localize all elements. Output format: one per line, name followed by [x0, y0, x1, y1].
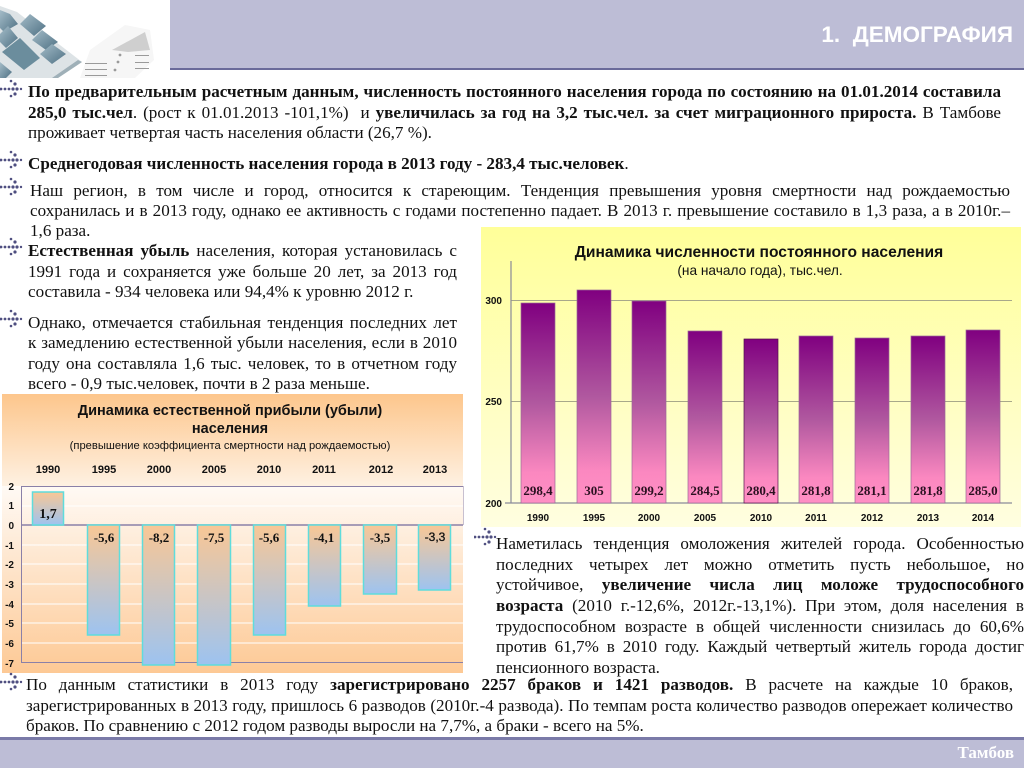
text block: slowing decrease: к замедлению естественной убыли населения, если в 2010 — [28, 333, 457, 352]
year labels: 2011 — [805, 513, 827, 524]
y axis labels: -5 — [5, 619, 14, 630]
y axis labels: 300 — [485, 296, 502, 307]
y axis labels: -3 — [5, 580, 14, 591]
header bar — [170, 0, 1024, 70]
y axis labels: -2 — [5, 560, 14, 571]
footer bar — [0, 737, 1024, 768]
bullet icon 1 — [0, 80, 22, 98]
text block: marriages and divorces — [26, 675, 1013, 735]
text block: aging region — [30, 181, 1010, 240]
text block: rejuvenation trend: последних четырех лет можно отметить пусть небольшое, но — [496, 555, 1024, 574]
bar values: 299,2 — [634, 483, 664, 498]
chart title: Динамика численности постоянного населения — [575, 244, 943, 261]
year labels: 2014 — [972, 513, 995, 524]
title: 1. ДЕМОГРАФИЯ — [821, 22, 1013, 47]
y axis labels: 200 — [485, 499, 502, 510]
text block: population intro — [28, 82, 1001, 142]
y axis labels: -6 — [5, 639, 14, 650]
bar values: 285,0 — [968, 483, 998, 498]
year labels: 1995 — [92, 464, 116, 476]
text block: natural decrease — [28, 241, 457, 301]
y axis labels: 1 — [8, 501, 14, 512]
text block: rejuvenation trend: устойчивое, увеличение числа лиц моложе трудоспособного — [496, 575, 1024, 594]
bar values: 281,8 — [913, 483, 943, 498]
bar values: 305 — [584, 483, 604, 498]
bar value: 2013: -3,3 — [425, 530, 446, 544]
chart title — [70, 403, 391, 452]
bullet icon 6 — [474, 528, 496, 546]
year labels: 2012 — [369, 464, 393, 476]
bar values: -7,5 — [204, 530, 225, 545]
text block: average population: Среднегодовая численность населения города в 2013 году - 283,4 тыс.человек. — [28, 154, 629, 173]
text block: rejuvenation trend: Наметилась тенденция омоложения жителей города. Особенностью — [496, 534, 1024, 553]
gridlines — [21, 506, 463, 643]
bar values: -5,6 — [94, 530, 115, 545]
text block: aging region: сохранилась и в 2013 году, однако ее активность с годами постепенно падает. В 2013 г. превышение составило в 1,3 раза, а в 2010г.– — [30, 201, 1010, 220]
text block: rejuvenation trend: пенсионного возраста. — [496, 658, 660, 677]
text block: marriages and divorces: зарегистрированных в 2013 году, пришлось 6 разводов (2010г.-4 развода). По темпам роста количество разводов опережает количество — [26, 696, 1013, 715]
year labels: 2010 — [257, 464, 281, 476]
y axis labels: -1 — [5, 541, 14, 552]
bar values: 281,1 — [857, 483, 887, 498]
axes — [21, 486, 464, 663]
year labels: 2010 — [750, 513, 773, 524]
year labels: 1995 — [583, 513, 606, 524]
bars — [32, 492, 450, 665]
chart title — [575, 244, 943, 278]
year labels: 2013 — [917, 513, 940, 524]
chart panel: permanent population dynamics — [481, 227, 1021, 527]
y axis labels: 0 — [8, 521, 14, 532]
chart background — [2, 394, 463, 673]
text block: slowing decrease: Однако, отмечается стабильная тенденция последних лет — [28, 313, 457, 332]
bullet icon 3 — [0, 178, 22, 196]
year labels — [36, 464, 447, 476]
footer label: Тамбов — [957, 743, 1014, 762]
axes — [505, 261, 1012, 503]
year labels: 1990 — [36, 464, 60, 476]
chart title: населения — [192, 421, 268, 437]
text block: slowing decrease — [28, 313, 457, 393]
year labels — [527, 513, 995, 524]
y axis labels — [5, 482, 14, 670]
chart background — [481, 227, 1021, 527]
year labels: 2012 — [861, 513, 884, 524]
text block: rejuvenation trend: трудоспособном возрасте в общей численности снизилась до 60,6% — [496, 617, 1024, 636]
bullet icon 7 — [0, 672, 22, 690]
y axis labels: -7 — [5, 659, 14, 670]
y axis labels: -4 — [5, 600, 14, 611]
year labels: 2000 — [638, 513, 661, 524]
chart panel: natural increase dynamics — [2, 394, 464, 673]
bar values: -5,6 — [259, 530, 280, 545]
text block: population intro: По предварительным расчетным данным, численность постоянного населения города по состоянию на 01.01.2014 составила — [28, 82, 1001, 101]
text block: population intro: 285,0 тыс.чел. (рост к 01.01.2013 -101,1%) и увеличилась за год на 3,2 тыс.чел. за счет миграционного прироста. В Тамбове — [28, 103, 1001, 122]
text block: slowing decrease: году она составляла 1,6 тыс. человек, то в отчетном году — [28, 354, 457, 373]
bar values: 280,4 — [746, 483, 776, 498]
bar values: 1,7 — [39, 507, 57, 522]
text block: population intro: проживает четвертая часть населения области (26,7 %). — [28, 123, 432, 142]
text block: slowing decrease: всего - 0,9 тыс.человек, почти в 2 раза меньше. — [28, 374, 370, 393]
y axis labels: 250 — [485, 397, 502, 408]
text block: marriages and divorces: браков. По сравнению с 2012 годом разводы выросли на 7,7%, а браки - всего на 5%. — [26, 716, 644, 735]
bar values: 281,8 — [801, 483, 831, 498]
year labels: 2005 — [202, 464, 226, 476]
bar values: 284,5 — [690, 483, 720, 498]
year labels: 2011 — [312, 464, 336, 476]
text block: rejuvenation trend — [496, 534, 1024, 677]
text block: natural decrease: составила - 934 человека или 94,4% к уровню 2012 г. — [28, 282, 413, 301]
bar values: 298,4 — [523, 483, 553, 498]
chart title: (превышение коэффициента смертности над рождаемостью) — [70, 440, 391, 452]
y axis labels: 2 — [8, 482, 14, 493]
text block: rejuvenation trend: возраста (2010 г.-12,6%, 2012г.-13,1%). При этом, доля населения в — [496, 596, 1024, 615]
text block: natural decrease: Естественная убыль населения, которая установилась с — [28, 241, 457, 260]
year labels: 2000 — [147, 464, 171, 476]
year labels: 2005 — [694, 513, 717, 524]
bar values: -3,5 — [370, 530, 391, 545]
bars — [521, 290, 1000, 503]
bar values — [523, 483, 998, 498]
year labels: 1990 — [527, 513, 550, 524]
bar values: -8,2 — [149, 530, 169, 545]
bullet icon 4 — [0, 238, 22, 256]
chart title: (на начало года), тыс.чел. — [677, 263, 843, 278]
bar values — [39, 507, 391, 545]
text block: rejuvenation trend: против 61,7% в 2010 году. Каждый четвертый житель города достиг — [496, 637, 1024, 656]
year labels: 2013 — [423, 464, 447, 476]
y axis labels — [485, 296, 502, 510]
text block: aging region: Наш регион, в том числе и город, относится к стареющим. Тенденция превышения уровня смертности над рождаемостью — [30, 181, 1010, 200]
text block: aging region: 1,6 раза. — [30, 221, 90, 240]
gridlines — [511, 300, 1012, 402]
header image: calculator and papers — [0, 6, 154, 78]
chart title: Динамика естественной прибыли (убыли) — [78, 403, 382, 419]
bullet icon 2 — [0, 150, 22, 168]
text block: natural decrease: 1991 года и сохраняется уже больше 20 лет, за 2013 год — [28, 262, 457, 281]
text block: marriages and divorces: По данным статистики в 2013 году зарегистрировано 2257 браков и 1421 разводов. В расчете на каждые 10 браков, — [26, 675, 1013, 694]
bullet icon 5 — [0, 310, 22, 328]
bar values: -4,1 — [314, 530, 334, 545]
